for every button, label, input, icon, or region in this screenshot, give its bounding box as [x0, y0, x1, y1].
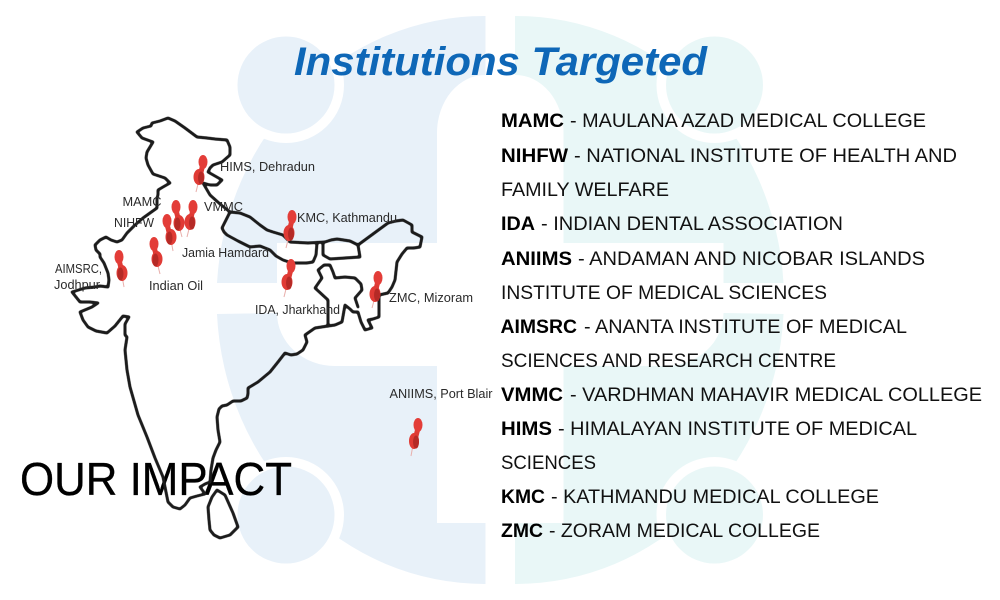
entry: VMMC: VMMC — [501, 384, 563, 406]
entry: NIHFW line 2: FAMILY WELFARE — [501, 179, 669, 201]
pin: VMMC — [184, 200, 198, 237]
pin: KMC Kathmandu — [284, 210, 296, 248]
label: Jamia Hamdard: Jamia Hamdard — [182, 246, 269, 260]
pin: NIHFW — [162, 214, 176, 251]
label: ANIIMS: ANIIMS, Port Blair — [390, 387, 492, 401]
label: HIMS: HIMS, Dehradun — [220, 160, 315, 174]
background logo: right teal half — [515, 16, 784, 584]
map pins — [114, 155, 422, 456]
entry: MAMC: MAMC — [501, 110, 564, 132]
label: IDA: IDA, Jharkhand — [255, 303, 340, 317]
entry: ANIIMS line 1: ANIIMS — [501, 248, 572, 270]
label: ZMC: ZMC, Mizoram — [389, 291, 473, 305]
entry: KMC: KMC — [501, 486, 545, 508]
entry: IDA: IDA — [501, 213, 535, 235]
background logo: left blue half — [217, 16, 486, 584]
entry: VMMC: - VARDHMAN MAHAVIR MEDICAL COLLEGE — [570, 384, 982, 406]
pin: ANIIMS Port Blair — [409, 418, 422, 456]
entry: ANIIMS line 1: - ANDAMAN AND NICOBAR ISLANDS — [578, 248, 925, 270]
pin: MAMC — [172, 200, 184, 237]
label: Indian Oil: Indian Oil — [149, 279, 203, 293]
entry: IDA: - INDIAN DENTAL ASSOCIATION — [541, 213, 843, 235]
map location labels — [54, 160, 492, 401]
pin: ZMC Mizoram — [370, 271, 382, 308]
pin: Indian Oil — [150, 237, 162, 274]
label: AIMSRC: AIMSRC, — [55, 262, 102, 276]
title: Institutions Targeted — [294, 40, 709, 84]
pin: AIMSRC Jodhpur — [114, 250, 128, 287]
entry: ZMC: - ZORAM MEDICAL COLLEGE — [549, 520, 820, 542]
map of India outline — [72, 118, 422, 538]
label: MAMC: MAMC — [122, 195, 162, 209]
entry: AIMSRC line 1: - ANANTA INSTITUTE OF MEDICAL — [584, 316, 907, 338]
entry: HIMS line 1: HIMS — [501, 418, 552, 440]
entry: KMC: - KATHMANDU MEDICAL COLLEGE — [551, 486, 879, 508]
entry: HIMS line 1: - HIMALAYAN INSTITUTE OF MEDICAL — [558, 418, 917, 440]
entry: NIHFW line 1: NIHFW — [501, 145, 569, 167]
entry: MAMC: - MAULANA AZAD MEDICAL COLLEGE — [570, 110, 926, 132]
entry: ZMC: ZMC — [501, 520, 543, 542]
entry: HIMS line 2: SCIENCES — [501, 452, 596, 474]
pin: HIMS Dehradun — [194, 155, 208, 192]
pin: IDA Jharkhand — [282, 259, 296, 297]
label: NIHFW: NIHFW — [114, 216, 154, 230]
label: VMMC: VMMC — [204, 200, 243, 214]
label: Jodhpur: Jodhpur — [54, 278, 100, 292]
entry: AIMSRC line 1: AIMSRC — [500, 316, 577, 338]
entry: NIHFW line 1: - NATIONAL INSTITUTE OF HEALTH AND — [574, 145, 957, 167]
our impact heading: OUR IMPACT — [20, 453, 292, 505]
entry: AIMSRC line 2: SCIENCES AND RESEARCH CENTRE — [501, 350, 836, 372]
entry: ANIIMS line 2: INSTITUTE OF MEDICAL SCIENCES — [501, 282, 827, 304]
list of institution abbreviations — [500, 110, 982, 542]
label: KMC: KMC, Kathmandu — [297, 211, 397, 225]
